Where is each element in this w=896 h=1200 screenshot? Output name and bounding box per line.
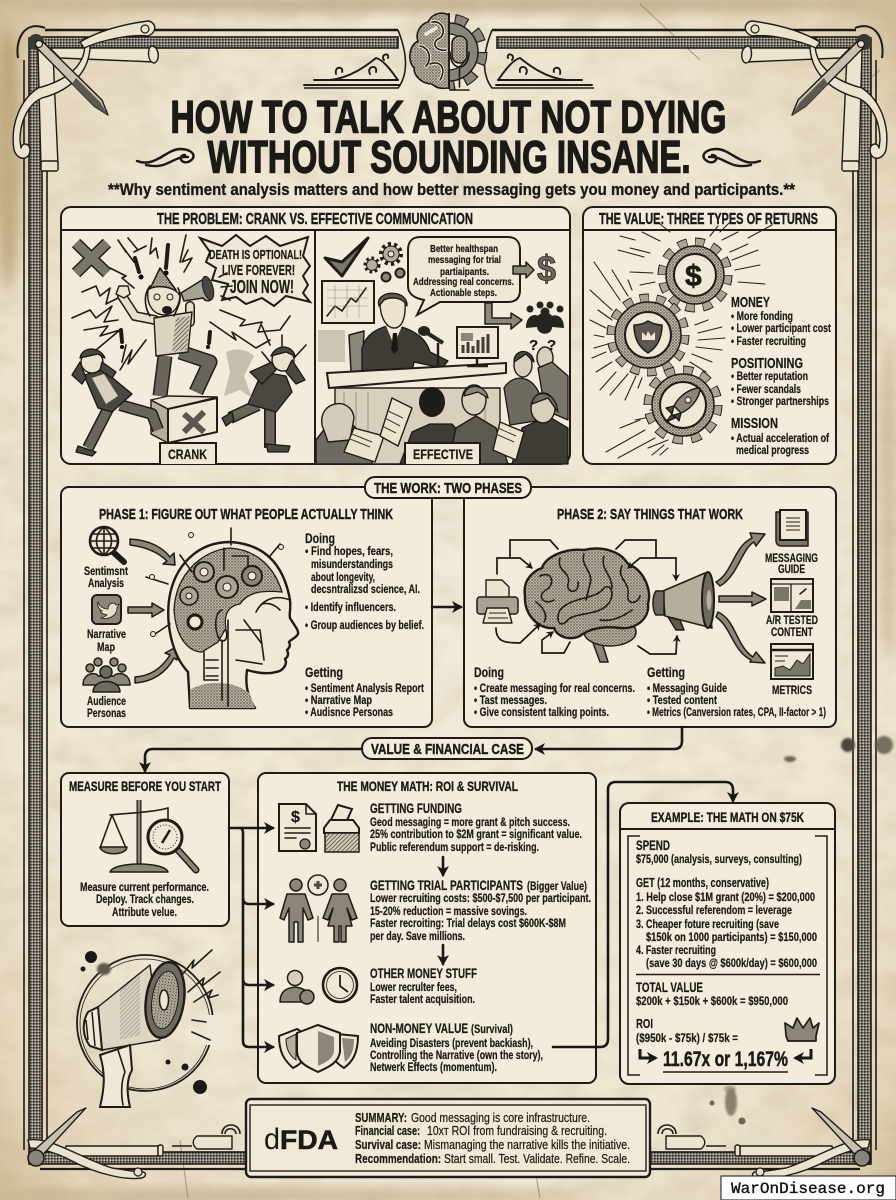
text: mission: MISSION <box>731 415 778 432</box>
panel: phase 1 <box>61 487 432 727</box>
crank speech burst: LIVE FOREVER! <box>222 263 295 279</box>
label: sentiment analysis <box>84 566 128 590</box>
icon: crown <box>785 1018 819 1041</box>
watermark: WarOnDisease.org <box>721 1176 896 1200</box>
arrow: money math to example <box>553 782 733 1047</box>
stains <box>710 736 893 1124</box>
text: getting <box>647 664 826 719</box>
corner: scrolls and compass, top right <box>742 21 887 171</box>
text: summary lines <box>355 1111 630 1166</box>
text: getting: • Tested content <box>647 693 717 707</box>
text: get: 4. Faster recruiting <box>636 943 716 957</box>
text: mission: • Actual acceleration of <box>731 431 830 445</box>
text: non-money value: NON-MONEY VALUE <box>370 1021 468 1036</box>
icon: scales and gauge magnifier <box>100 800 196 872</box>
text: measure: Measure current performance. <box>80 880 209 894</box>
text: doing: Doing <box>305 530 335 546</box>
text: get: 3. Cheaper foture recruiting (save <box>636 917 779 931</box>
text: total value: $200k + $150k + $600k = $950,000 <box>636 994 788 1008</box>
text: getting funding: Geod messaging = more grant & pitch success. <box>370 815 570 829</box>
ornaments beside emblem <box>304 54 592 85</box>
text: summary lines: Financial case: <box>355 1124 420 1138</box>
arrow: phase 1 to phase 2 <box>432 606 461 608</box>
icon: sentiment analysis magnifier <box>90 527 124 562</box>
panel: summary <box>246 1099 650 1177</box>
label: audience personas <box>87 696 126 720</box>
text: summary lines: Survival case: <box>355 1138 421 1152</box>
text: get: GET (12 months, conservative) <box>636 875 769 890</box>
text: doing: about longevity, <box>311 570 375 584</box>
figure: ranting crank with megaphone <box>116 268 232 396</box>
text: getting: • Narrative Map <box>305 693 372 707</box>
text: non-money value: (Survival) <box>471 1022 513 1036</box>
icon: megaphone <box>653 572 714 630</box>
watermark: WarOnDisease.org: WarOnDisease.org <box>731 1180 885 1198</box>
text: trial participants: 15-20% reduction = massive sovings. <box>370 904 527 918</box>
arrow: phase 2 to value pill <box>536 727 682 749</box>
heading: example: EXAMPLE: THE MATH ON $75K <box>651 809 804 825</box>
text: getting funding: 25% contribution to $2M grant = significant value. <box>370 827 582 841</box>
text: get: (save 30 days @ $600k/day) = $600,000 <box>646 956 817 970</box>
title <box>170 92 726 182</box>
text: positioning: • Fewer scandals <box>731 382 801 396</box>
text: doing <box>305 530 424 632</box>
illustration: big megaphone <box>77 950 220 1107</box>
crank speech burst: JOIN NOW! <box>230 276 294 297</box>
text: spend: SPEND <box>636 838 670 853</box>
pill: the work: THE WORK: TWO PHASES <box>374 480 522 497</box>
text: doing <box>474 664 635 719</box>
text: positioning: • Better reputation <box>731 369 808 383</box>
ink blots <box>80 951 207 1094</box>
text: getting funding: Public referendum support = de-risking. <box>370 840 539 854</box>
icon: gears <box>366 245 404 282</box>
subtitle: **Why sentiment analysis matters and how better messaging gets you money and participants.** <box>108 180 795 199</box>
text: summary lines: Mismanaging the narrative kills the initiative. <box>424 1138 630 1152</box>
desk <box>327 363 506 464</box>
heading: the problem: THE PROBLEM: CRANK VS. EFFECTIVE COMMUNICATION <box>157 211 473 228</box>
speech bubble: better messaging <box>408 237 520 315</box>
text: summary lines: 10xт ROI from fundraising & recruiting. <box>427 1124 607 1138</box>
text: get: 1. Help close $1M grant (20%) = $200,000 <box>636 890 815 904</box>
icon: narrative map bird <box>92 595 121 624</box>
label: narrative map: Map <box>97 642 115 654</box>
text: get <box>636 875 817 970</box>
text: spend <box>636 838 802 866</box>
chart on wall <box>322 281 374 323</box>
label: messaging guide: MESSAGING <box>765 553 818 565</box>
text: trial participants: (Bigger Value) <box>527 879 587 893</box>
illustration: head with gears <box>146 528 298 708</box>
speech bubble: better messaging: Actionable steps. <box>430 287 497 299</box>
gear: positioning <box>613 300 683 370</box>
icon: dollar: $ <box>537 248 556 289</box>
icon: messaging guide <box>776 510 808 546</box>
text: money <box>731 294 831 348</box>
text: money: • Lower participant cost <box>731 321 831 335</box>
pill: value and financial case: VALUE & FINANCIAL CASE <box>371 742 524 758</box>
label: messaging guide <box>765 553 818 576</box>
text: measure: Attribute velue. <box>112 905 177 919</box>
figure: speaker at desk <box>349 293 448 372</box>
figure: fleeing man right <box>222 347 305 452</box>
text: roi: ROI <box>636 1016 653 1031</box>
panel: phase 2 <box>464 487 836 727</box>
text: mission <box>731 415 830 457</box>
logo: dFDA: d <box>264 1123 280 1156</box>
icon: ballot box <box>324 805 359 852</box>
text: get: $150k on 1000 participants) = $150,000 <box>646 930 817 944</box>
gear: money <box>664 244 726 306</box>
text: non-money value: Controlling the Narrative (own the story), <box>370 1048 543 1062</box>
crank speech burst <box>200 235 310 306</box>
text: get: 2. Successful referendom = leverage <box>636 903 792 917</box>
label: A/B tested content: CONTENT <box>771 627 813 639</box>
icon: grant document: $ <box>291 809 300 826</box>
text: money: • Faster recruiting <box>731 334 806 348</box>
text: doing: misunderstandings <box>311 557 393 571</box>
text: summary lines: Start small. Test. Validate. Refine. Scale. <box>444 1152 630 1166</box>
label: audience personas: Audience <box>87 696 126 708</box>
text: other money stuff: Lower recrulter fees, <box>370 980 457 994</box>
panel: the money math <box>258 773 596 1083</box>
question marks <box>529 337 556 354</box>
text: getting: • Sentiment Analysis Report <box>305 681 424 695</box>
text: getting: • Audisnce Personas <box>305 705 393 719</box>
EFFECTIVE label <box>405 443 480 464</box>
question marks: ? <box>529 337 538 354</box>
speech bubble: better messaging: Better healthspan <box>430 243 498 255</box>
title: WITHOUT SOUNDING INSANE. <box>208 132 690 182</box>
icon: metrics <box>771 644 813 679</box>
text: positioning: • Stronger partnerships <box>731 394 829 408</box>
text: total value: TOTAL VALUE <box>636 980 703 995</box>
arrow: value pill to measure panel <box>145 749 362 771</box>
text: non-money value: Netwerk Effects (momentum). <box>370 1060 497 1074</box>
corner: scrolls and compass, bottom right <box>658 1108 870 1178</box>
label: A/B tested content: A/R TESTED <box>766 615 818 627</box>
arrows to deliverables <box>716 533 766 663</box>
CRANK label <box>160 443 216 464</box>
branching arrows from measure panel <box>229 828 273 1047</box>
icon: wrong X <box>76 243 107 273</box>
box with X <box>151 396 217 443</box>
text: positioning <box>731 355 829 408</box>
text: trial participants: per day. Save millions. <box>370 929 465 943</box>
label: sentiment analysis: Analysis <box>88 578 124 590</box>
text: getting funding <box>370 801 582 854</box>
text: money: • More fonding <box>731 309 793 323</box>
text: doing: • Create messaging for real concerns. <box>474 681 635 695</box>
text: other money stuff: OTHER MONEY STUFF <box>370 966 477 981</box>
EFFECTIVE label: EFFECTIVE <box>413 446 473 462</box>
gear: money: $ <box>685 260 702 293</box>
panel: example math <box>620 803 835 1084</box>
illustration: brain <box>525 549 649 662</box>
faded background figure <box>224 349 254 398</box>
text: non-money value <box>370 1021 543 1074</box>
icon: recruiter and clock <box>280 968 357 1004</box>
label: audience personas: Personas <box>87 708 126 720</box>
icon: check mark <box>325 238 368 276</box>
text: getting: • Messaging Guide <box>647 681 727 695</box>
label: narrative map <box>87 629 126 654</box>
microphone <box>418 326 446 370</box>
label: narrative map: Narrative <box>87 629 126 641</box>
top emblem: brain, gear and microphone <box>410 13 482 90</box>
text: doing: • Give consistent talking points. <box>474 705 609 719</box>
sun ray lines <box>590 222 772 458</box>
illustration: effective scene <box>316 237 568 464</box>
corner: scrolls and compass, bottom left <box>28 1108 240 1178</box>
panel: the value <box>583 207 836 464</box>
pill: value and financial case <box>362 738 532 759</box>
text: trial participants: Faster recroiting: Trial delays cost $600K-$8M <box>370 916 566 930</box>
question marks: ? <box>547 337 556 354</box>
text: spend: $75,000 (analysis, surveys, consulting) <box>636 852 802 866</box>
text: mission: medical progress <box>736 443 809 457</box>
icon: grant document <box>279 804 316 851</box>
text: summary lines: Good messaging is core infrastructure. <box>411 1111 590 1125</box>
monitor <box>457 327 498 366</box>
arrows into head <box>128 539 178 683</box>
text: total value <box>636 980 788 1008</box>
panel: measure before you start <box>61 773 229 926</box>
faded background monitor <box>318 330 345 362</box>
feedback loop arrows <box>496 540 677 654</box>
heading: money math: THE MONEY MATH: ROI & SURVIVAL <box>337 778 518 794</box>
heading: measure: MEASURE BEFORE YOU START <box>69 778 221 794</box>
pill: the work <box>365 477 531 498</box>
speech bubble: better messaging: messaging for trial <box>428 254 501 266</box>
text: measure <box>80 880 209 919</box>
text: doing: • Tast messages. <box>474 693 547 707</box>
label: A/B tested content <box>766 615 818 639</box>
icon: A/B tested content <box>771 579 813 612</box>
text: doing: • Identify influencers. <box>305 600 396 614</box>
arrow: down <box>442 945 444 964</box>
text: getting: Getting <box>305 664 343 680</box>
text: doing: decsntralizsd science, AI. <box>311 582 420 596</box>
text: roi <box>636 1016 788 1071</box>
text: getting <box>305 664 424 719</box>
heading: phase 2: PHASE 2: SAY THINGS THAT WORK <box>557 506 743 523</box>
text: summary lines: Recommendation: <box>355 1152 441 1166</box>
corner: scrolls and compass, top left <box>13 21 158 171</box>
text: measure: Deploy. Track changes. <box>96 892 194 906</box>
text: doing: Doing <box>474 664 504 680</box>
icon: result arrows <box>640 1049 811 1058</box>
icon: printer <box>477 580 518 623</box>
illustration: crank scene <box>72 235 310 464</box>
gear: mission <box>650 372 716 438</box>
text: other money stuff: Faster talent acquisition. <box>370 992 475 1006</box>
icon: audience personas <box>83 658 130 692</box>
text: getting funding: GETTING FUNDING <box>370 801 462 816</box>
label: metrics: METRICS <box>772 685 812 697</box>
text: doing: • Find hopes, fears, <box>305 544 393 558</box>
arrows to money and participants <box>485 262 534 329</box>
icon: crowd <box>526 302 564 334</box>
text: trial participants <box>370 878 591 943</box>
icon: shields <box>279 1025 358 1072</box>
text: positioning: POSITIONING <box>731 355 803 372</box>
logo: dFDA <box>264 1123 338 1156</box>
text: summary lines: SUMMARY: <box>355 1111 407 1125</box>
CRANK label: CRANK <box>168 446 207 462</box>
exclamation marks <box>120 245 210 349</box>
title flourishes <box>137 149 760 166</box>
text: other money stuff <box>370 966 477 1006</box>
figure: fleeing man left <box>72 349 158 456</box>
text: doing: • Group audiences by belief. <box>305 618 424 632</box>
scribble lightning marks <box>72 235 306 370</box>
icon: trial participants <box>280 875 357 942</box>
heading: phase 1: PHASE 1: FIGURE OUT WHAT PEOPLE ACTUALLY THINK <box>99 506 393 523</box>
crank speech burst: DEATH IS OPTIONAL! <box>209 248 302 262</box>
text: money: MONEY <box>731 294 770 311</box>
text: getting: Getting <box>647 664 685 680</box>
logo: dFDA: FDA <box>280 1125 338 1155</box>
panel: the problem <box>61 207 570 464</box>
speech bubble: better messaging: partiaipants. <box>440 266 489 278</box>
label: messaging guide: GUIDE <box>778 564 805 576</box>
text: trial participants: GETTING TRIAL PARTICIPANTS <box>370 878 523 893</box>
arrow: down <box>442 857 444 875</box>
audience figures <box>316 347 568 464</box>
text: trial participants: Lower recruiting costs: $500-$7,500 per participant. <box>370 891 591 905</box>
label: sentiment analysis: Sentimsnt <box>84 566 128 578</box>
speech bubble: better messaging: Addressing real concerns. <box>413 276 514 288</box>
text: roi: 11.67x or 1,167% <box>663 1047 788 1071</box>
text: roi: ($950k - $75k) / $75k = <box>636 1033 738 1045</box>
text: non-money value: Aveiding Disasters (prevent backiash), <box>370 1036 533 1050</box>
